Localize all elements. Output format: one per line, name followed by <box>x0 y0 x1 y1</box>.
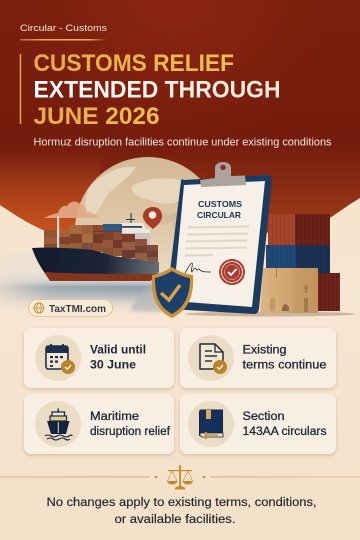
card: maritime disruption relief: Maritime <box>90 409 139 423</box>
illustration: rear stacked containers <box>266 214 340 311</box>
footer note: or available facilities. <box>114 512 236 526</box>
kicker: Circular - Customs <box>20 23 107 40</box>
card: existing terms continue: Existing <box>242 342 287 356</box>
ship waterline <box>44 272 157 281</box>
seal stamp <box>219 259 245 285</box>
kicker: Circular - Customs: Circular - Customs <box>20 23 107 34</box>
illustration: container ship <box>32 213 159 281</box>
illustration: rocks behind shield <box>130 291 162 312</box>
illustration: clipboard with customs circular <box>166 162 272 314</box>
illustration: globe <box>75 157 200 274</box>
card: section 143AA circulars: Section <box>242 409 285 423</box>
icon: ship on waves <box>45 408 72 440</box>
ship superstructure <box>120 213 150 247</box>
illustration: shield with check <box>152 267 193 318</box>
title: Customs Relief Extended Through June 2026: CUSTOMS RELIEF <box>34 50 234 77</box>
icon: book with bookmark <box>200 410 223 439</box>
illustration: ground shadow <box>185 312 355 316</box>
paper heading <box>197 199 242 220</box>
icon: calendar with check <box>46 344 75 374</box>
card: valid until 30 June: 30 June <box>90 358 136 372</box>
card: maritime disruption relief: disruption relief <box>90 424 171 438</box>
card: existing terms continue <box>180 328 336 388</box>
title: Customs Relief Extended Through June 2026 <box>20 50 280 130</box>
card: valid until 30 June <box>24 328 174 388</box>
icon: globe <box>34 303 44 313</box>
card: section 143AA circulars: 143AA circulars <box>242 424 326 438</box>
card: existing terms continue: terms continue <box>242 358 327 372</box>
clipboard board <box>166 175 272 314</box>
illustration: sea <box>0 276 155 308</box>
brand pill: TaxTMI.com: TaxTMI.com <box>49 304 106 315</box>
footer note: No changes apply to existing terms, conditions, <box>46 495 316 509</box>
paper heading: CUSTOMS <box>198 199 242 209</box>
illustration: distant mist <box>0 252 60 284</box>
paper sheet <box>173 181 265 307</box>
illustration: cloud <box>44 202 100 218</box>
paper heading: CIRCULAR <box>197 210 241 220</box>
icon: scales <box>167 465 193 490</box>
brand pill: TaxTMI.com <box>28 300 112 316</box>
footer note <box>46 495 316 526</box>
icon: document with check <box>200 344 227 374</box>
card: section 143AA circulars <box>180 394 336 454</box>
illustration: location pin <box>143 207 162 229</box>
clipboard clip <box>200 162 246 187</box>
subtitle: Hormuz disruption facilities continue under existing conditions <box>34 136 332 148</box>
title: Customs Relief Extended Through June 2026: EXTENDED THROUGH <box>34 76 280 104</box>
card: valid until 30 June: Valid until <box>90 342 146 356</box>
background: red header with curved lower edge <box>0 0 360 245</box>
paper text lines <box>184 226 249 256</box>
illustration: cardboard box <box>260 268 318 313</box>
signature <box>185 263 211 273</box>
ship hull <box>32 248 159 280</box>
footer panel background <box>0 477 360 540</box>
ship cargo containers <box>44 216 158 263</box>
card: maritime disruption relief <box>24 394 174 454</box>
title: Customs Relief Extended Through June 2026: JUNE 2026 <box>34 103 160 130</box>
divider with scales of justice icon <box>0 465 360 490</box>
